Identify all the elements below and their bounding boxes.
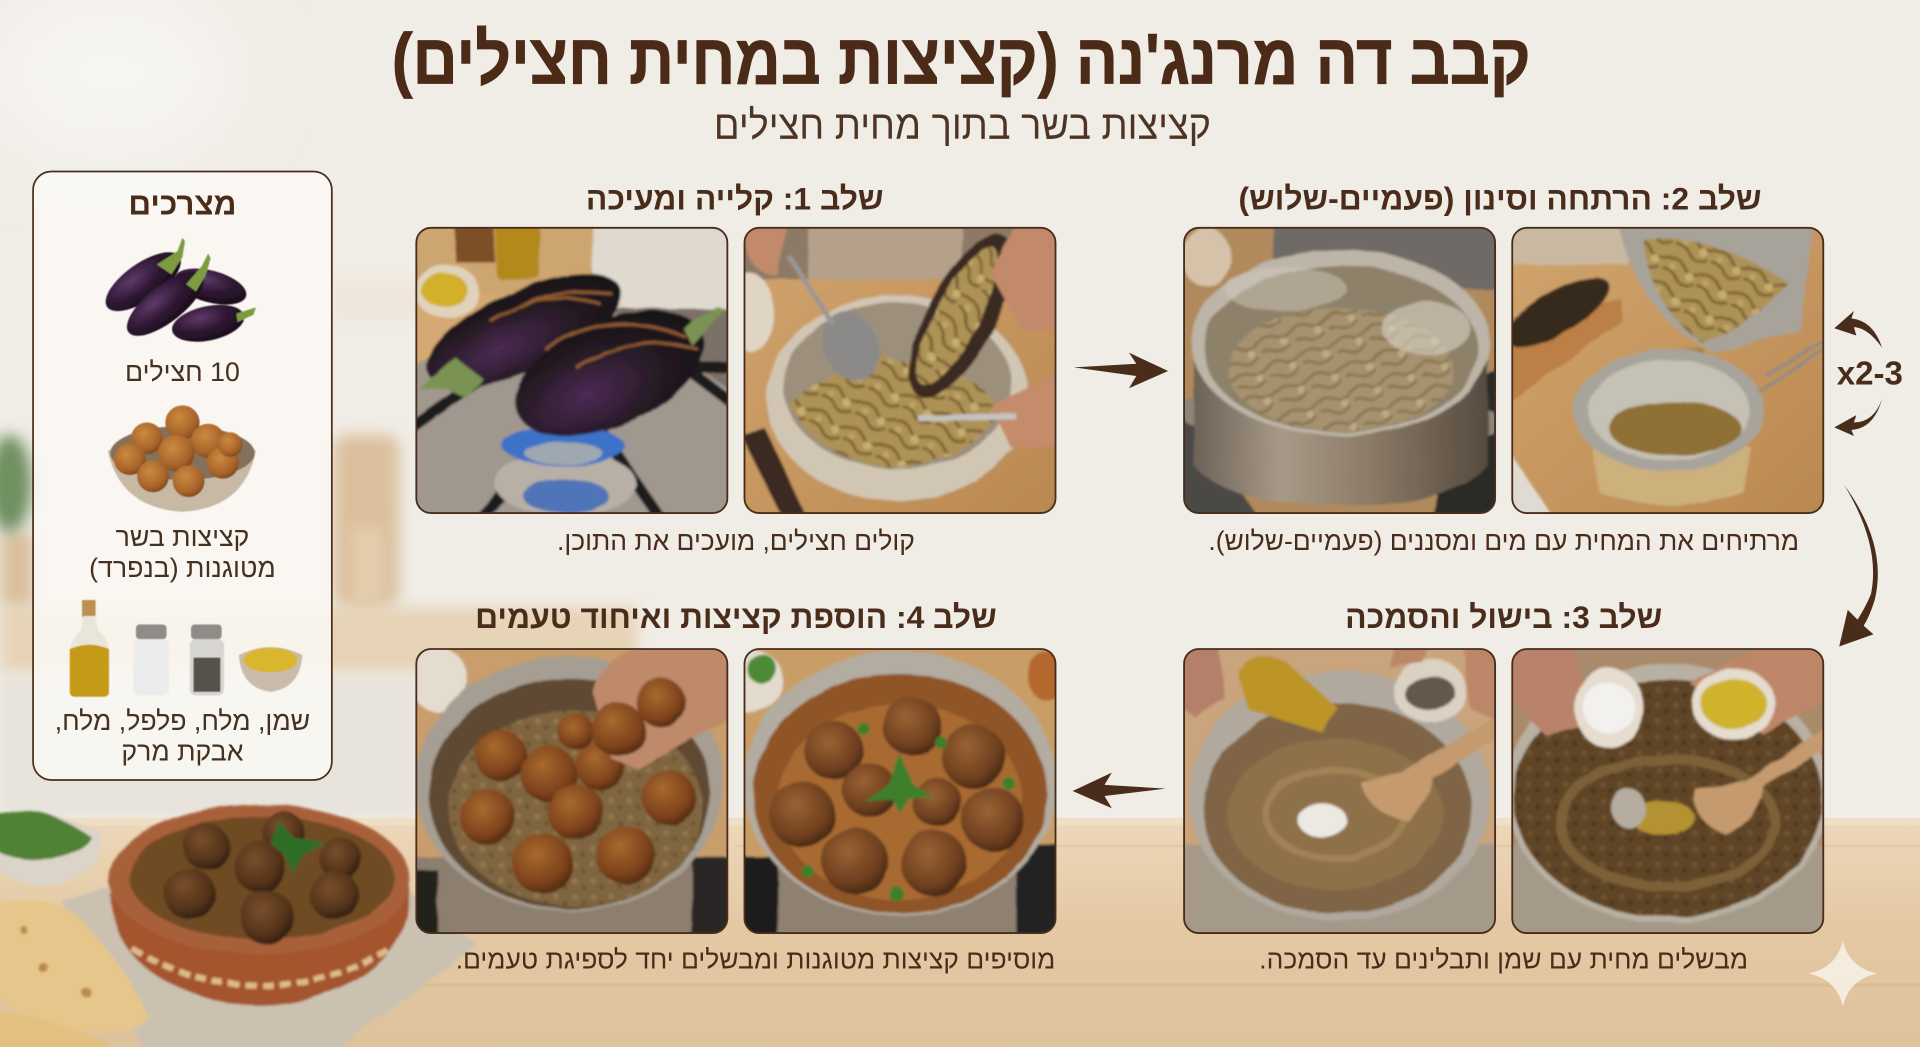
title: קבב דה מרנג'נה (קציצות במחית חצילים) [392, 20, 1531, 99]
step 2 caption: מרתיחים את המחית עם מים ומסננים (פעמיים-שלוש). [1208, 526, 1799, 556]
icon: sparkle [1809, 940, 1877, 1007]
icon: oil bottle, salt, pepper and soup powder [70, 600, 302, 697]
arrow: step 1 to step 2 [1074, 353, 1168, 388]
subtitle: קציצות בשר בתוך מחית חצילים [714, 101, 1211, 147]
ingredient: meatballs label: קציצות בשר [116, 522, 249, 552]
step 3 photo: seasoning mash with salt and powder [1506, 643, 1829, 943]
icon: eggplants [97, 238, 256, 348]
step 1 caption: קולים חצילים, מועכים את התוכן. [557, 526, 915, 556]
image: final dish with bowl, herbs and pita [0, 805, 478, 1047]
step 1 photo: mashing eggplant in bowl [745, 228, 1055, 512]
ingredient: seasonings label [55, 706, 310, 766]
step 4 caption: מוסיפים קציצות מטוגנות ומבשלים יחד לספיגת טעמים. [456, 945, 1055, 975]
step 4 heading: שלב 4: הוספת קציצות ואיחוד טעמים [475, 599, 997, 635]
ingredient: seasonings label: אבקת מרק [121, 736, 244, 766]
ingredients heading: מצרכים [128, 186, 236, 221]
step 2 photo: straining mash through sieve [1513, 228, 1822, 512]
label: repeat two to three times with arrows: x2-3 [1837, 356, 1903, 393]
step 4 photo: finished meatballs in sauce [745, 650, 1055, 932]
step 1 photo: eggplants on gas burner [410, 220, 733, 520]
arrow: step 3 to step 4 [1073, 773, 1166, 808]
ingredient: meatballs label: מטוגנות (בנפרד) [89, 553, 276, 583]
ingredient: meatballs label [89, 522, 276, 583]
step 2 heading: שלב 2: הרתחה וסינון (פעמיים-שלוש) [1238, 180, 1762, 216]
panel: ingredients [33, 171, 332, 780]
step 1 heading: שלב 1: קלייה ומעיכה [586, 180, 884, 216]
step 4 photo: adding meatballs to sauce by hand [417, 650, 726, 932]
step 3 photo: adding oil and pepper [1178, 643, 1501, 943]
step 3 heading: שלב 3: בישול והסמכה [1345, 599, 1662, 635]
step 2 photo: boiling mash in pot [1178, 220, 1501, 520]
ingredient: seasonings label: שמן, מלח, פלפל, מלח, [55, 706, 310, 736]
arrow: step 2 to step 3 [1839, 485, 1878, 647]
ingredient: eggplants label: 10 חצילים [125, 357, 240, 387]
step 3 caption: מבשלים מחית עם שמן ותבלינים עד הסמכה. [1259, 945, 1748, 975]
icon: bowl of meatballs [108, 405, 256, 512]
label: repeat two to three times with arrows [1834, 311, 1903, 436]
